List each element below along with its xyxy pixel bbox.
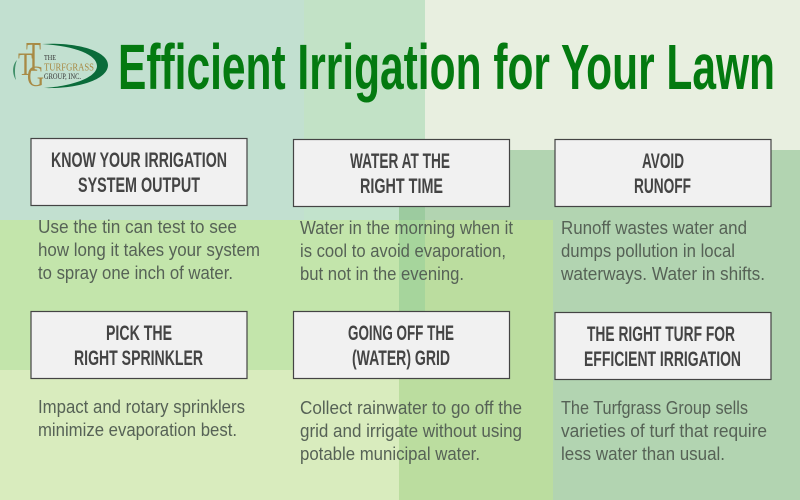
body text: how long it takes your system	[38, 240, 260, 260]
panel: going off the water grid	[294, 312, 522, 464]
heading box	[31, 312, 247, 378]
panel: the right turf	[555, 312, 771, 464]
heading box: RIGHT TIME	[360, 174, 443, 198]
logo monogram: G	[27, 60, 44, 93]
panel: avoid runoff	[555, 140, 771, 284]
heading box: WATER AT THE	[350, 149, 450, 173]
heading box	[294, 312, 510, 378]
heading box: AVOID	[642, 149, 684, 173]
body text: Water in the morning when it	[300, 218, 513, 238]
body text: Collect rainwater to go off the	[300, 398, 522, 418]
heading box: RUNOFF	[634, 174, 691, 198]
body text	[561, 398, 767, 464]
logo wordmark	[44, 53, 94, 81]
logo monogram: T	[18, 47, 33, 83]
logo wordmark: TURFGRASS	[44, 62, 94, 74]
body text: dumps pollution in local	[561, 241, 735, 261]
heading box: GOING OFF THE	[348, 321, 454, 345]
logo monogram: T	[26, 35, 41, 81]
panel: pick the right sprinkler	[31, 312, 247, 440]
body text	[38, 217, 260, 283]
heading box: SYSTEM OUTPUT	[78, 173, 200, 197]
heading box	[294, 140, 510, 206]
heading box: PICK THE	[106, 321, 172, 345]
body text: to spray one inch of water.	[38, 263, 233, 283]
body text: Use the tin can test to see	[38, 217, 237, 237]
body text: grid and irrigate without using	[300, 421, 522, 441]
body text: less water than usual.	[561, 444, 725, 464]
body text: minimize evaporation best.	[38, 420, 237, 440]
logo wordmark: THE	[44, 53, 56, 62]
panel: know your irrigation system output	[31, 138, 260, 283]
heading box: (WATER) GRID	[352, 346, 450, 370]
heading box	[555, 312, 771, 380]
body text: but not in the evening.	[300, 264, 464, 284]
body text: potable municipal water.	[300, 444, 480, 464]
heading box	[31, 138, 247, 206]
logo swoosh	[42, 44, 108, 88]
heading box: RIGHT SPRINKLER	[74, 346, 203, 370]
body text	[300, 398, 522, 464]
logo monogram	[18, 35, 44, 93]
logo: The Turfgrass Group	[13, 35, 108, 93]
body text: waterways. Water in shifts.	[560, 264, 765, 284]
body text: Runoff wastes water and	[561, 218, 747, 238]
heading box: KNOW YOUR IRRIGATION	[51, 148, 227, 172]
body text: is cool to avoid evaporation,	[300, 241, 506, 261]
heading box	[555, 140, 771, 206]
body text: Impact and rotary sprinklers	[38, 397, 245, 417]
panel: water at the right time	[294, 140, 513, 284]
body text	[300, 218, 513, 284]
logo wordmark: GROUP, INC.	[44, 72, 81, 81]
body text	[38, 397, 245, 440]
body text	[560, 218, 765, 284]
body text: The Turfgrass Group sells	[561, 398, 748, 418]
body text: varieties of turf that require	[561, 421, 767, 441]
